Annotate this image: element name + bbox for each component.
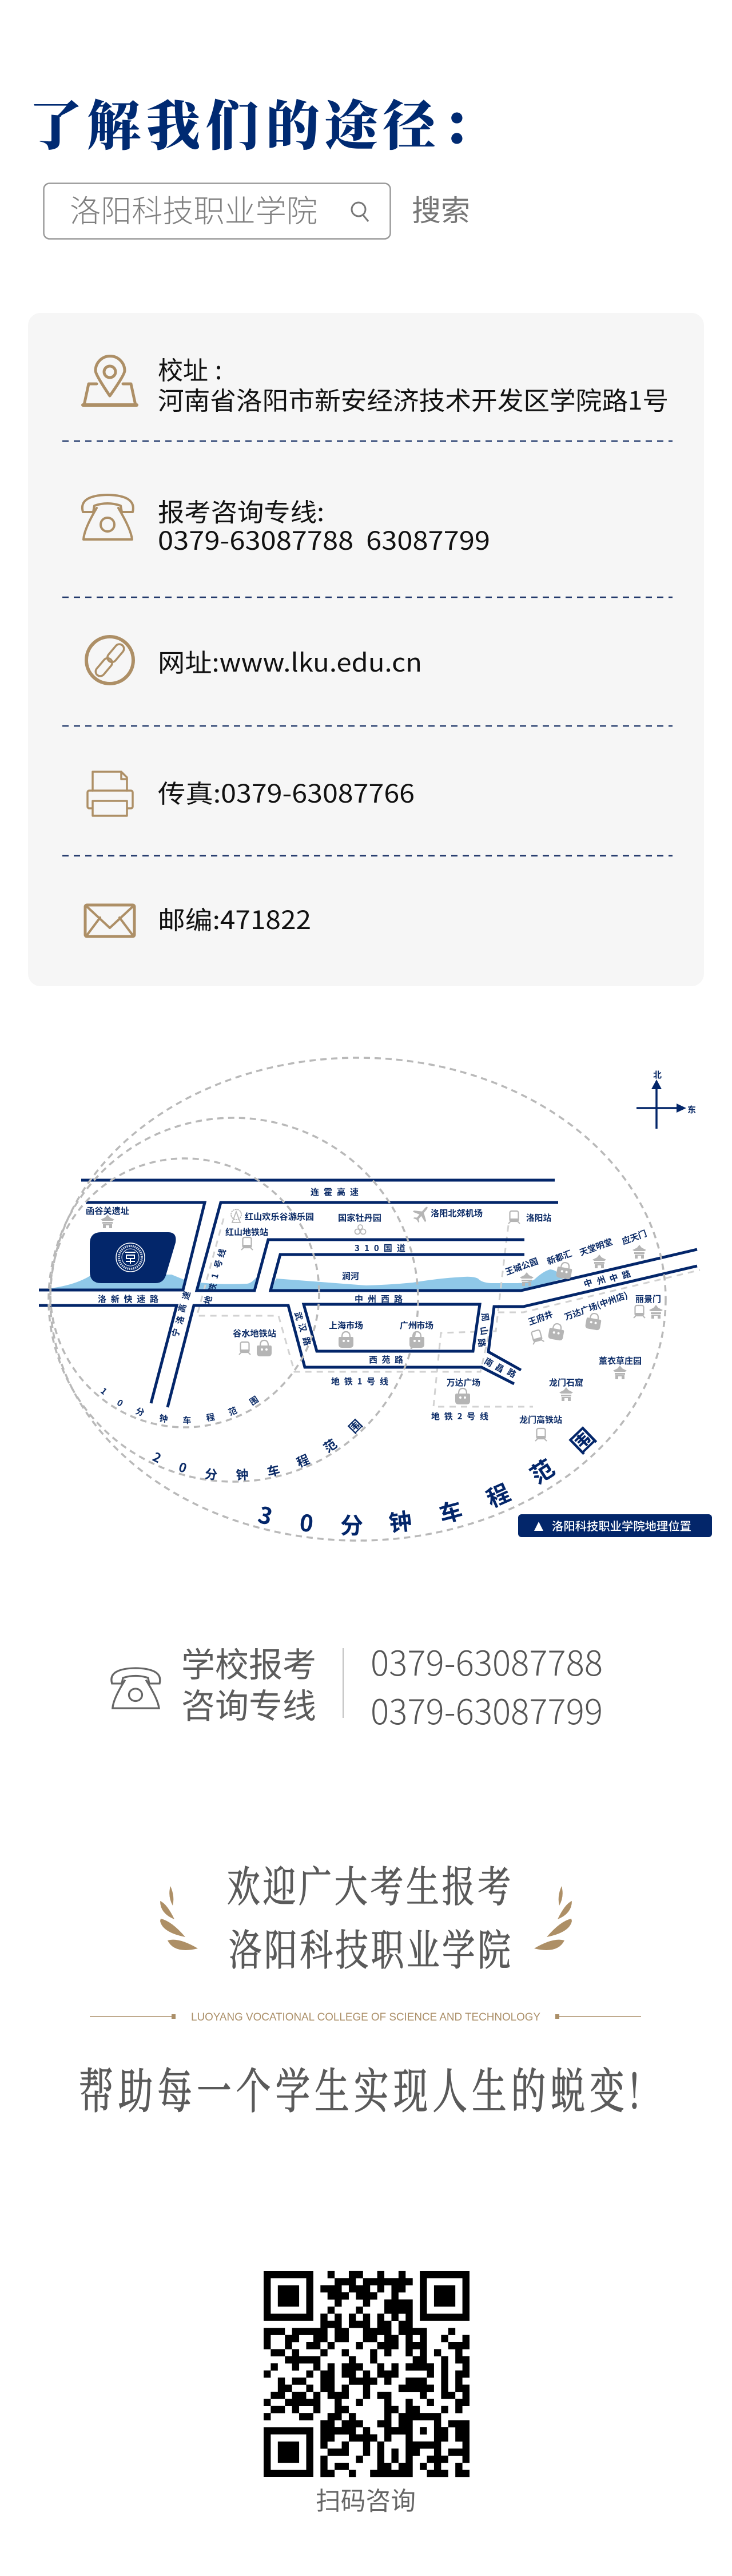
drive-time rings [49,1058,666,1541]
ring label: 10 minutes: 0 [115,1396,125,1410]
north label: 北 [653,1069,662,1081]
hotline numbers [371,1636,603,1734]
hotline numbers: 0379-63087788 63087799 [158,521,490,557]
map labels: 路 [505,1366,519,1380]
map labels: 南 [482,1355,496,1370]
college name: 洛阳科技职业学院 [229,1916,511,1977]
icon: telephone [82,495,133,539]
hotline heading: 学校报考 [181,1638,316,1686]
map labels: 红山地铁站 [225,1226,268,1238]
ring label: 20 minutes: 围 [344,1415,366,1437]
ring label: 30 minutes: 程 [480,1475,515,1514]
ring label: 10 minutes: 围 [247,1393,261,1408]
ring label: 10 minutes: 分 [134,1404,146,1419]
ring label: 10 minutes: 1 [98,1385,110,1398]
map labels: 连霍高速 [311,1186,359,1198]
ring label: 10 minutes: 范 [226,1404,239,1418]
ring label: 30 minutes: 车 [435,1492,466,1530]
map labels: 洛新快速路 [98,1293,158,1305]
map labels: 铁 [206,1282,220,1293]
map labels: 应天门 [620,1227,649,1247]
map caption badge [518,1514,712,1537]
ring label: 20 minutes: 2 [150,1447,165,1467]
map labels: 王府井 [526,1308,555,1328]
ring label: 20 minutes: 分 [204,1464,218,1483]
ring label: 10 minutes: 程 [205,1411,216,1424]
map labels [86,1186,661,1426]
map labels: 武 [292,1311,305,1322]
map labels: 汉 [296,1322,309,1333]
ring label: 10 minutes: 车 [182,1414,192,1426]
panel: contact details [28,313,704,986]
map labels: 谷水地铁站 [233,1327,276,1339]
ring label: 30 minutes: 0 [298,1505,316,1539]
ring label: 20 minutes: 钟 [236,1464,249,1484]
search bar [43,183,390,239]
map labels: 线 [215,1248,229,1259]
postcode: 邮编:471822 [158,900,311,936]
english college name: LUOYANG VOCATIONAL COLLEGE OF SCIENCE AND TECHNOLOGY [191,2011,540,2023]
campus badge [90,1232,176,1283]
map labels: 函谷关遗址 [86,1205,129,1217]
map labels: 洛 [173,1315,187,1326]
QR caption: 扫码咨询 [316,2480,416,2517]
map labels: 天堂明堂 [578,1236,614,1259]
map labels: 中 [607,1271,620,1285]
welcome line: 欢迎广大考生报考 [227,1853,511,1914]
ring label: 20 minutes [150,1415,366,1484]
map labels: 中州西路 [355,1293,403,1305]
map labels: 龙门石窟 [549,1376,583,1388]
map labels: 龙门高铁站 [519,1414,562,1426]
map labels: 上海市场 [329,1319,363,1331]
map labels: 1 [208,1272,221,1280]
map labels: 新都汇 [545,1247,574,1267]
map labels: 王城公园 [503,1255,540,1278]
ring label: 10 minutes [98,1385,261,1426]
map labels: 国家牡丹园 [338,1212,381,1224]
map labels: 万达广场(中州店) [563,1289,629,1323]
map labels: 红山欢乐谷游乐园 [245,1210,314,1222]
map labels: 高 [176,1303,189,1314]
ring label: 30 minutes: 范 [523,1450,560,1491]
chart: campus location map [39,1058,712,1541]
map labels: 地 [201,1295,215,1306]
icon: magnifier [352,203,368,221]
search placeholder: 洛阳科技职业学院 [70,186,317,231]
river [39,1269,563,1291]
map labels: 速 [180,1290,193,1301]
map labels: 洛阳站 [526,1212,551,1224]
laurel left [160,1886,198,1950]
map icons [101,1202,663,1441]
map labels: 310国道 [355,1242,405,1254]
metro lines [197,1218,700,1407]
address label: 校址: [158,350,222,387]
map labels: 广州市场 [400,1319,433,1331]
icon: location pin [83,356,137,405]
ring label: 10 minutes: 钟 [158,1412,169,1425]
ring label: 30 minutes: 分 [340,1507,364,1541]
slogan: 帮助每一个学生实现人生的蜕变! [79,2053,640,2122]
QR code [264,2271,470,2477]
map labels: 州 [595,1273,607,1287]
map labels: 薰衣草庄园 [599,1355,642,1367]
map labels: 路 [300,1336,313,1347]
fax number: 传真:0379-63087766 [158,773,415,810]
map labels: 山 [478,1325,491,1336]
map caption badge: 洛阳科技职业学院地理位置 [552,1517,691,1534]
college emblem [116,1243,145,1272]
address text: 河南省洛阳市新安经济技术开发区学院路1号 [158,380,669,417]
ring label: 20 minutes: 程 [293,1450,312,1471]
map labels: 洛阳北郊机场 [431,1207,483,1219]
hotline block [112,1636,603,1734]
map labels: 涧河 [342,1270,359,1282]
ring label: 20 minutes: 0 [177,1457,189,1477]
compass [636,1069,696,1129]
map labels: 昌 [493,1360,507,1375]
map labels: 周 [479,1312,492,1322]
search label: 搜索 [412,187,470,229]
ring label: 30 minutes: 围 [562,1420,602,1459]
map labels: 地铁1号线 [331,1375,388,1387]
icon: link [86,637,133,684]
ring label: 30 minutes [255,1420,602,1541]
website: 网址:www.lku.edu.cn [158,642,422,679]
map labels: 路 [620,1267,632,1281]
ring label: 30 minutes: 3 [255,1497,276,1532]
map labels: 丽景门 [635,1293,661,1305]
roads [39,1180,697,1407]
map labels: 宁 [169,1327,183,1339]
map labels: 万达广场 [447,1376,480,1388]
hotline label: 报考咨询专线: [158,492,324,529]
hotline numbers: 0379-63087788 [371,1636,603,1686]
hotline heading: 咨询专线 [181,1679,316,1728]
map labels: 号 [212,1259,225,1270]
icon: telephone grey [112,1668,160,1708]
hotline numbers: 0379-63087799 [371,1685,603,1734]
icon: fax [87,772,133,816]
title: 了解我们的途径： [29,83,495,160]
ring label: 30 minutes: 钟 [387,1503,413,1538]
east label: 东 [687,1104,696,1116]
icon: envelope [85,905,134,936]
map labels: 路 [475,1337,488,1348]
closing message [79,1853,641,2122]
map labels: 地铁2号线 [431,1410,488,1422]
ring label: 20 minutes: 车 [265,1460,281,1480]
ring label: 20 minutes: 范 [320,1434,340,1456]
map labels: 中 [582,1276,594,1290]
laurel right [534,1886,572,1950]
hotline heading [181,1638,316,1728]
map labels: 西苑路 [369,1354,403,1366]
